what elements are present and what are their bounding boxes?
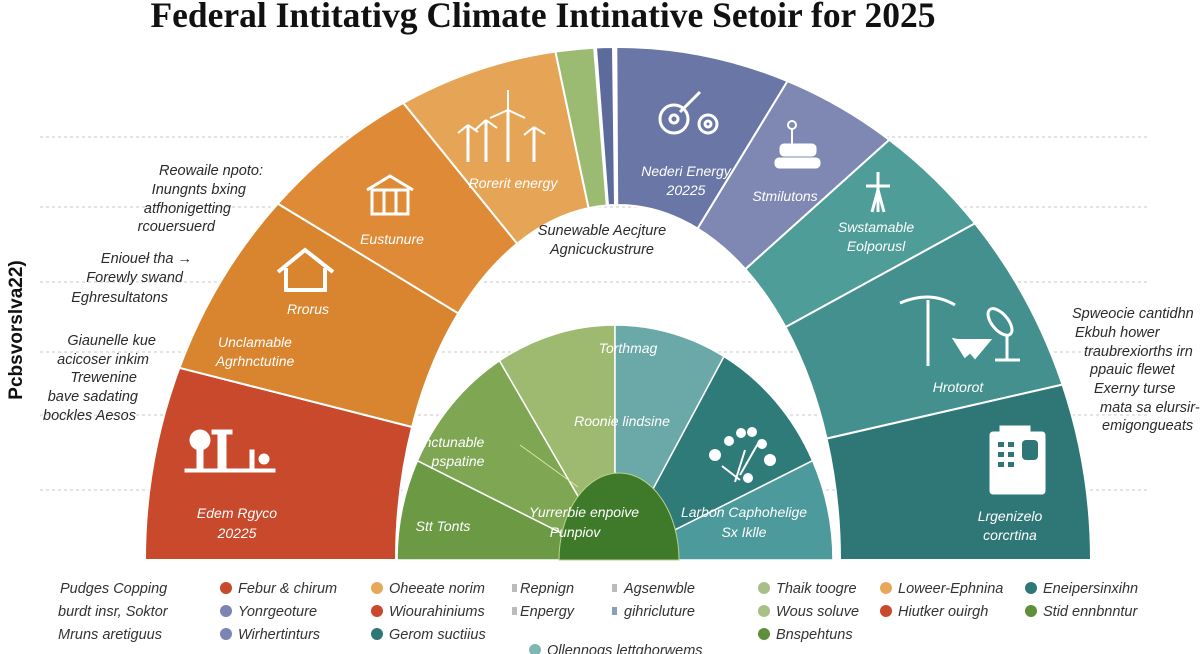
segment: Hrotorot xyxy=(786,223,1062,439)
segment labels: Yurrerbie enpoive xyxy=(529,504,639,520)
legend: Gerom suctiius xyxy=(389,627,486,643)
segment labels: 20225 xyxy=(666,182,706,198)
icon: red city xyxy=(185,430,275,472)
legend: Repnign xyxy=(520,581,574,597)
segment labels: 20225 xyxy=(217,525,257,541)
segment labels: Eustunure xyxy=(360,231,424,247)
legend: Febur & chirum xyxy=(238,581,337,597)
legend: Agsenwble xyxy=(623,581,695,597)
segment labels: Larbon Caphohelige xyxy=(681,504,807,520)
legend: Oheeate norim xyxy=(389,581,485,597)
segment labels: Unclamable xyxy=(218,334,292,350)
left annotations xyxy=(43,163,263,424)
left annotations: rcouersuerd xyxy=(138,219,216,235)
legend: Hiutker ouirgh xyxy=(898,604,988,620)
segment: Rorerit energy xyxy=(403,52,589,244)
segment labels xyxy=(197,163,1043,543)
legend: Thaik toogre xyxy=(776,581,857,597)
inner pie chart xyxy=(397,325,833,560)
right annotations: traubrexiorths irn xyxy=(1084,344,1193,360)
segment: Edem Rgyco xyxy=(145,368,412,560)
left annotations: acicoser inkim xyxy=(57,352,149,368)
segment labels: Lrgenizelo xyxy=(978,508,1043,524)
segment: Stmilutons xyxy=(698,81,889,269)
legend: Wiourahiniums xyxy=(389,604,485,620)
right annotations: Exerny turse xyxy=(1094,381,1175,397)
left annotations: Inungnts bxing xyxy=(152,182,246,198)
segment: green strip xyxy=(555,48,607,208)
icons xyxy=(185,90,1045,494)
legend: Loweer-Ephnina xyxy=(898,581,1003,597)
right annotations xyxy=(1072,306,1200,434)
legend: burdt insr, Soktor xyxy=(58,604,169,620)
icon: wind and dish xyxy=(900,297,1020,366)
left annotations: Reowaile npoto: xyxy=(159,163,263,179)
segment labels: corcrtina xyxy=(983,527,1037,543)
outer arch chart xyxy=(145,47,1091,560)
legend: Wirhertinturs xyxy=(238,627,320,643)
segment labels: Nederi Energy xyxy=(641,163,732,179)
icon: leaf sprig xyxy=(710,428,775,482)
legend: gihricluture xyxy=(624,604,695,620)
segment: Swstamable xyxy=(745,140,975,327)
icon: house xyxy=(278,250,333,290)
icon: document xyxy=(990,426,1045,494)
legend: Mruns aretiguus xyxy=(58,627,162,643)
icon: wind turbines xyxy=(458,90,545,162)
segment: thin slate xyxy=(596,47,615,205)
left annotations: Eghresultatons xyxy=(71,290,168,306)
segment labels: Stmilutons xyxy=(752,188,818,204)
center gap text: Sunewable Aecjture xyxy=(538,223,666,239)
center gap text: Agnicuckustrure xyxy=(549,242,654,258)
legend: Eneipersinxihn xyxy=(1043,581,1138,597)
legend: Wous soluve xyxy=(776,604,859,620)
legend: Pudges Copping xyxy=(60,581,167,597)
segment labels: Hrotorot xyxy=(933,379,984,395)
center gap text xyxy=(538,223,666,258)
legend: Yonrgeoture xyxy=(238,604,317,620)
left annotations: Forewly swand xyxy=(86,270,184,286)
segment labels: Agrhnctutine xyxy=(215,353,295,369)
left annotations: bave sadating xyxy=(48,389,138,405)
vertical axis label: Pcbsvorslva22) xyxy=(6,260,27,400)
legend: Stid ennbnntur xyxy=(1043,604,1138,620)
segment labels: Torthmag xyxy=(599,340,658,356)
segment labels: Sx Iklle xyxy=(721,524,767,540)
right annotations: Spweocie cantidhn xyxy=(1072,306,1194,322)
segment: Nederi Energy xyxy=(616,47,788,229)
segment labels: Rorerit energy xyxy=(469,175,558,191)
segment: Lrgenizelo xyxy=(827,385,1091,560)
left annotations: Trewenine xyxy=(70,370,137,386)
icon: pipeline xyxy=(775,121,820,168)
segment labels: Inctunable xyxy=(420,434,485,450)
left annotations: Giaunelle kue xyxy=(67,333,156,349)
right annotations: Ekbuh hower xyxy=(1075,325,1161,341)
legend: Enpergy xyxy=(520,604,575,620)
right annotations: mata sa elursir- xyxy=(1100,400,1200,416)
segment labels: Punpiov xyxy=(550,524,601,540)
segment labels: Edem Rgyco xyxy=(197,505,277,521)
right annotations: emigongueats xyxy=(1102,418,1193,434)
right annotations: ppauic flewet xyxy=(1089,362,1176,378)
callout line xyxy=(520,445,578,487)
segment labels: pspatine xyxy=(431,453,485,469)
center dome xyxy=(559,473,679,560)
segment: Eustunure xyxy=(278,103,517,313)
left annotations: Enioueł tha → xyxy=(101,251,192,267)
segment: Unclamable Agrhnctutine xyxy=(179,204,458,427)
icon: tower xyxy=(866,172,890,212)
segment labels: Roonie lindsine xyxy=(574,413,670,429)
icon: building xyxy=(367,176,413,214)
segment labels: Eolporusl xyxy=(847,238,906,254)
segment labels: Rrorus xyxy=(287,301,329,317)
legend xyxy=(58,581,1138,654)
icon: disc xyxy=(660,92,717,133)
legend: Bnspehtuns xyxy=(776,627,853,643)
left annotations: atfhonigetting xyxy=(144,201,231,217)
segment labels: Swstamable xyxy=(838,219,914,235)
left annotations: bockles Aesos xyxy=(43,408,136,424)
segment labels: Stt Tonts xyxy=(416,518,470,534)
